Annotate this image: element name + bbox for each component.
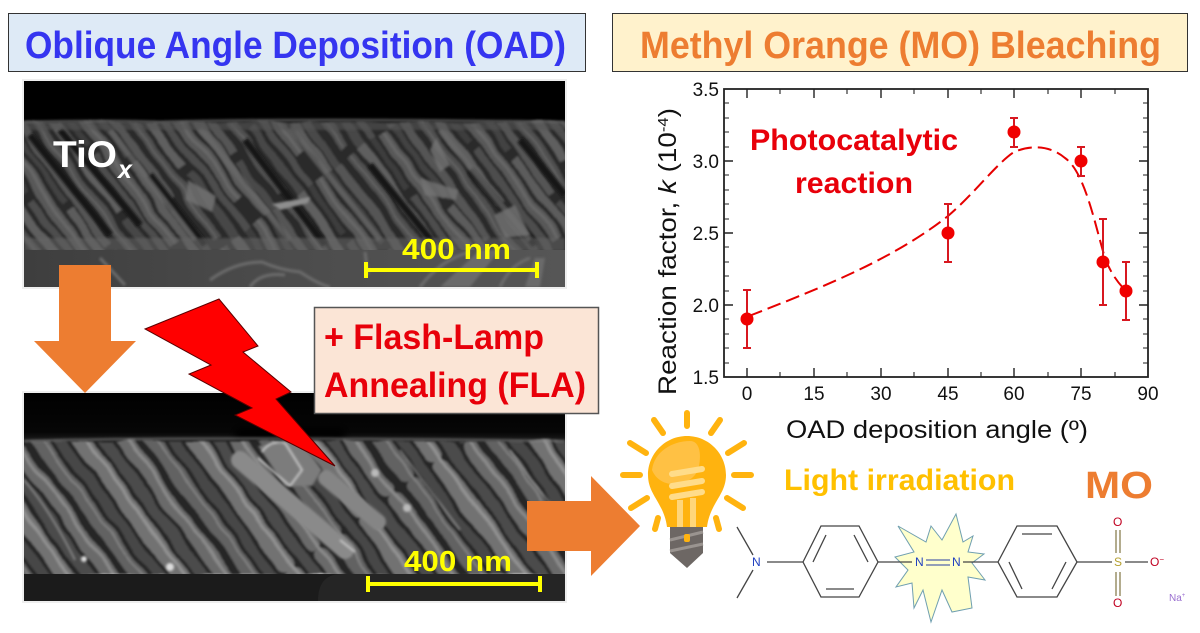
scale bar: top image 400 nm: 400 nm xyxy=(402,234,511,266)
chart annotation: Photocatalytic reaction xyxy=(750,124,958,200)
x tick labels: 90 xyxy=(1137,384,1159,405)
scale bar: bottom image 400 nm: 400 nm xyxy=(404,546,512,578)
y axis title: ) xyxy=(654,108,682,117)
y tick labels: 1.5 xyxy=(693,368,719,389)
chemical structure: methyl orange: O xyxy=(1150,555,1159,569)
y tick labels: 3.5 xyxy=(693,80,719,101)
panel header: Oblique Angle Deposition: Oblique Angle Deposition (OAD) xyxy=(25,25,566,67)
y tick labels: 2.5 xyxy=(693,224,719,245)
x tick labels: 15 xyxy=(803,384,825,405)
data points xyxy=(740,126,1132,326)
error bars xyxy=(743,118,1130,348)
dashed fit curve xyxy=(749,147,1126,316)
chemical structure: methyl orange: − xyxy=(1159,555,1164,564)
SEM image: as-deposited TiOx nanocolumns xyxy=(0,79,600,289)
x axis title: OAD deposition angle (º) xyxy=(786,416,1088,444)
chemical structure: methyl orange: N xyxy=(952,555,961,569)
chemical structure: methyl orange: N xyxy=(752,555,761,569)
callout: Flash-Lamp Annealing xyxy=(314,308,598,414)
chemical structure: methyl orange: + xyxy=(1182,593,1186,599)
x tick labels: 45 xyxy=(937,384,959,405)
y axis title: -4 xyxy=(655,117,672,132)
chemical structure: methyl orange: O xyxy=(1113,596,1122,610)
chart: reaction factor vs deposition angle xyxy=(654,80,1159,444)
callout: Flash-Lamp Annealing: Annealing (FLA) xyxy=(324,366,586,405)
chart annotation: Photocatalytic reaction: Photocatalytic xyxy=(750,124,958,157)
y axis title: Reaction factor, k (10 xyxy=(654,137,682,395)
x tick labels: 75 xyxy=(1070,384,1092,405)
scale bar: top image 400 nm xyxy=(366,234,537,278)
panel header: Oblique Angle Deposition xyxy=(8,14,586,72)
chemical structure: methyl orange: S xyxy=(1114,555,1122,569)
x tick labels: 30 xyxy=(870,384,892,405)
chemical structure: methyl orange: Na xyxy=(1169,593,1182,604)
y tick labels: 3.0 xyxy=(693,152,719,173)
icon: light bulb xyxy=(623,413,751,568)
arrow: down from as-deposited to annealed xyxy=(34,265,136,393)
text: Light irradiation: Light irradiation xyxy=(784,464,1015,497)
x tick labels xyxy=(742,384,1159,405)
arrow: right to light bulb xyxy=(527,476,640,576)
text: MO: MO xyxy=(1085,465,1153,507)
callout: Flash-Lamp Annealing: + Flash-Lamp xyxy=(324,318,544,357)
label: TiOx: x xyxy=(116,156,133,184)
panel header: Methyl Orange Bleaching: Methyl Orange (MO) Bleaching xyxy=(640,25,1161,67)
y tick labels xyxy=(693,80,719,389)
label: TiOx: TiO xyxy=(53,134,117,175)
plot frame and ticks xyxy=(724,89,1148,377)
panel header: Methyl Orange Bleaching xyxy=(612,14,1188,72)
chemical structure: methyl orange xyxy=(737,514,1186,622)
y tick labels: 2.0 xyxy=(693,296,719,317)
x tick labels: 60 xyxy=(1003,384,1025,405)
icon: lightning bolt xyxy=(145,299,335,466)
label: TiOx xyxy=(53,134,133,184)
chemical structure: methyl orange: N xyxy=(915,555,924,569)
chemical structure: methyl orange: O xyxy=(1113,515,1122,529)
chart annotation: Photocatalytic reaction: reaction xyxy=(795,167,913,200)
x tick labels: 0 xyxy=(742,384,752,405)
SEM image: flash-lamp annealed TiOx nanocolumns xyxy=(0,391,600,603)
scale bar: bottom image 400 nm xyxy=(368,546,540,592)
highlight: azo bond burst xyxy=(895,514,985,622)
